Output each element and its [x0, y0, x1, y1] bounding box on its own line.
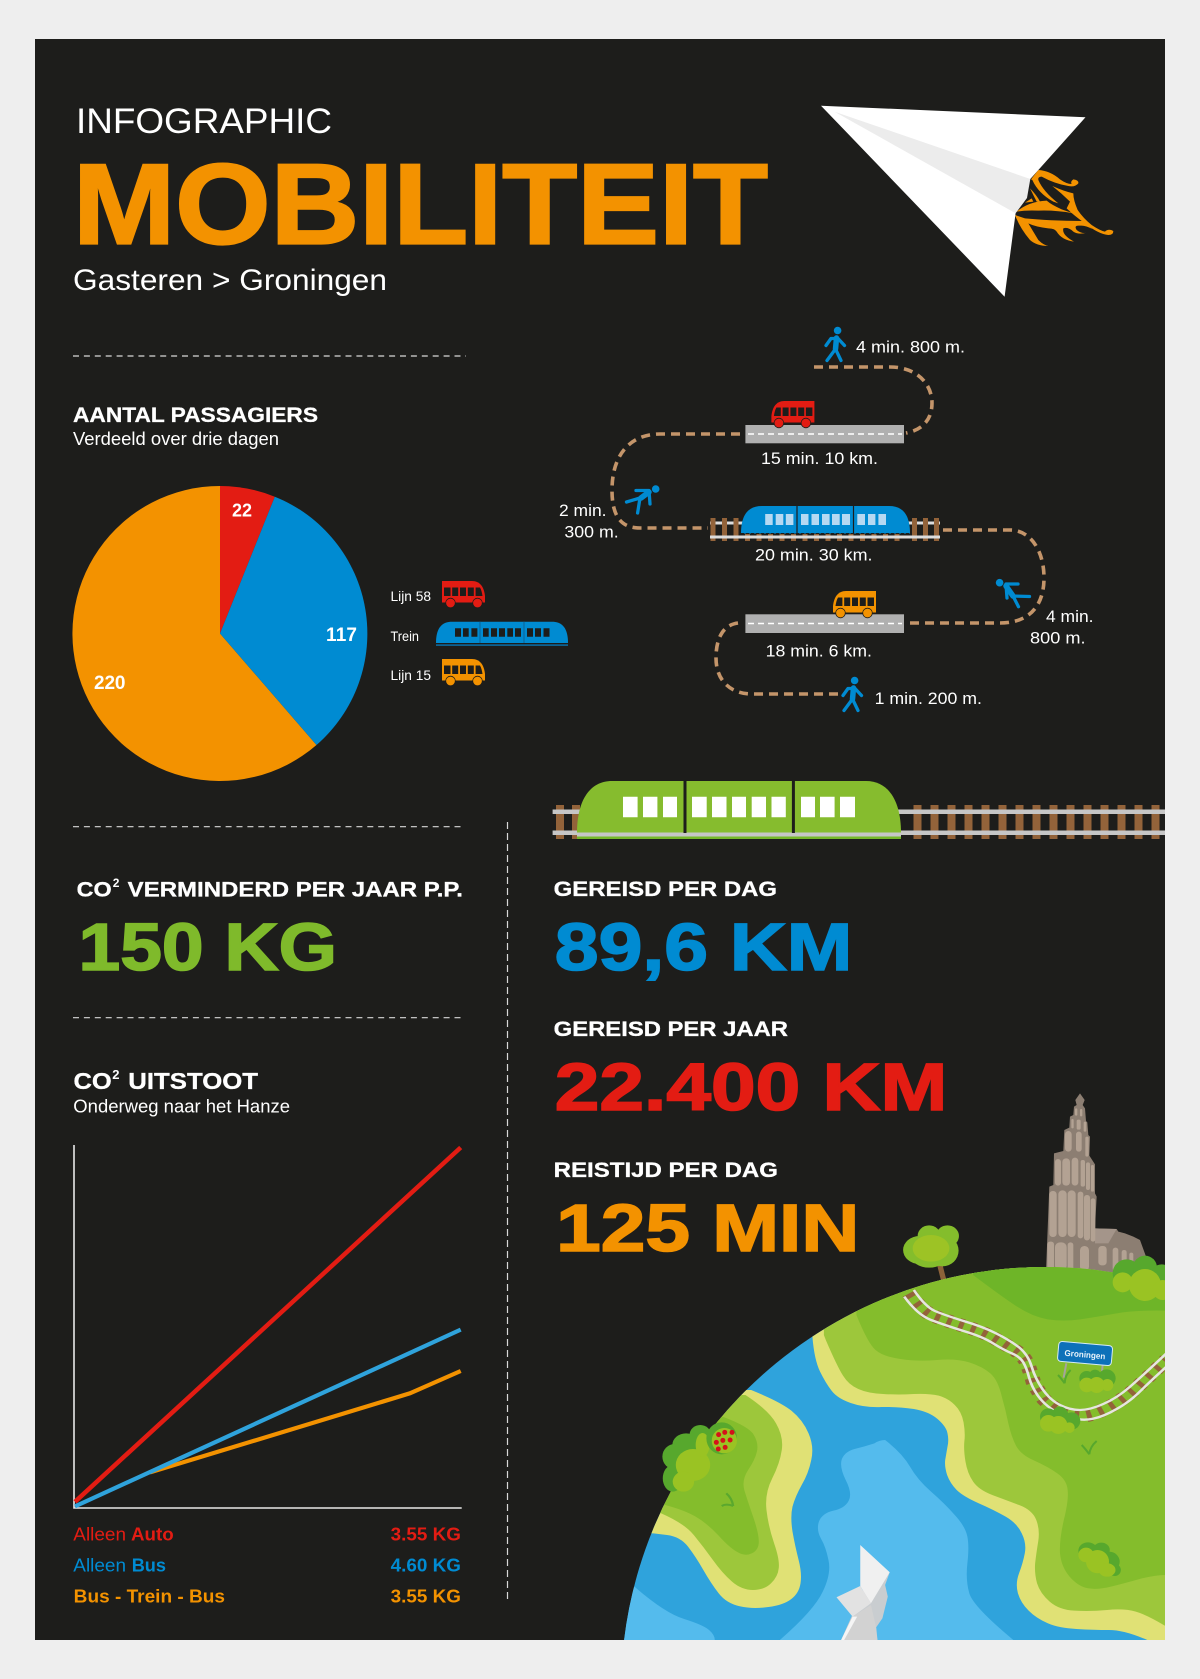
stat: co2 verminderd: 150 KG: [78, 910, 337, 985]
sign: groningen: Groningen: [1064, 1348, 1106, 1361]
train dividers: [685, 781, 793, 833]
icon: walker bottom: [843, 677, 862, 710]
label: 4 min 800 m: 4 min. 800 m.: [856, 338, 965, 357]
legend: alleen auto: [73, 1523, 461, 1544]
chart legend: [73, 1523, 461, 1606]
divider: [73, 826, 465, 828]
label: 18 min 6 km: 18 min. 6 km.: [766, 642, 872, 661]
line: bus: [75, 1330, 461, 1506]
stat: gereisd per dag: [554, 878, 852, 985]
pie chart: 220: [94, 673, 126, 694]
pie chart: [72, 486, 367, 781]
chart axes: [74, 1145, 462, 1508]
pie chart: 22: [232, 501, 252, 521]
icon: runner left: [626, 485, 660, 513]
label: 2 min 300 m: [559, 501, 619, 542]
divider: [73, 1017, 465, 1019]
train body: [577, 781, 901, 833]
bush: lower right: [1078, 1542, 1121, 1577]
stat: gereisd per jaar: [554, 1018, 947, 1125]
bush: island with berries: [662, 1422, 737, 1492]
icon: iceberg: [837, 1545, 890, 1640]
green train on track: [553, 781, 1165, 839]
legend: lijn 58: [390, 581, 485, 608]
icon: blue train on track: [710, 506, 940, 541]
legend: alleen auto: Alleen: [73, 1523, 126, 1544]
title: mobiliteit: MOBILITEIT: [73, 142, 768, 268]
icon: walker top: [826, 327, 844, 360]
train windows: [623, 797, 855, 817]
heading: co2 uitstoot: 2: [112, 1067, 120, 1082]
legend: trein: [390, 622, 568, 646]
heading: infographic: INFOGRAPHIC: [76, 101, 332, 141]
label: 4 min 800 m right: 4 min.: [1046, 607, 1094, 626]
legend: bus trein bus: [74, 1586, 461, 1606]
railway: [904, 1290, 1166, 1420]
icon: tree: [903, 1225, 959, 1282]
legend: alleen bus: 4.60 KG: [391, 1554, 461, 1575]
globe sphere: [624, 1267, 1165, 1640]
route diagram: [559, 327, 1094, 710]
heading: co2 uitstoot: Onderweg naar het Hanze: [73, 1096, 290, 1117]
subtitle: route: Gasteren > Groningen: [73, 264, 387, 297]
legend: lijn 15: [390, 659, 485, 686]
left island: [638, 1390, 812, 1608]
legend: lijn 15: Lijn 15: [390, 667, 431, 683]
bushes and plants near sign: [1040, 1363, 1116, 1454]
legend: bus trein bus: Bus - Trein - Bus: [74, 1586, 225, 1606]
stat: gereisd per jaar: GEREISD PER JAAR: [554, 1018, 788, 1041]
stat: co2 verminderd: VERMINDERD PER JAAR P.P.: [128, 879, 463, 902]
sign: groningen: [1057, 1341, 1113, 1366]
label: 20 min 30 km: 20 min. 30 km.: [755, 546, 872, 565]
line chart: [74, 1145, 462, 1508]
label: 2 min 300 m: 2 min.: [559, 501, 606, 520]
legend: lijn 58: Lijn 58: [390, 588, 431, 604]
heading: co2 uitstoot: UITSTOOT: [128, 1068, 258, 1094]
legend: alleen bus: [73, 1554, 461, 1575]
stat: gereisd per dag: 89,6 KM: [555, 910, 852, 985]
legend: alleen auto: 3.55 KG: [391, 1523, 461, 1544]
heading: co2 uitstoot: CO: [74, 1068, 112, 1094]
main land: [812, 1233, 1166, 1640]
heading: aantal passagiers: AANTAL PASSAGIERS: [73, 404, 318, 427]
stat: reistijd per dag: 125 MIN: [556, 1191, 859, 1266]
icon: martini church: [1046, 1093, 1150, 1275]
icon: orange bus: [833, 591, 876, 618]
label: 1 min 200 m: 1 min. 200 m.: [875, 689, 982, 708]
legend: alleen bus: Bus: [132, 1554, 166, 1575]
stat: reistijd per dag: [554, 1159, 859, 1266]
route: dashed paths: [612, 367, 1044, 694]
road: line 15: [745, 614, 904, 633]
vertical divider: [506, 822, 508, 1602]
stat: reistijd per dag: REISTIJD PER DAG: [554, 1159, 778, 1182]
plane fold: [835, 112, 1030, 213]
pie chart: 117: [326, 625, 357, 646]
pie legend: [390, 581, 568, 686]
icon: red bus: [771, 401, 814, 428]
globe illustration: [624, 1094, 1165, 1640]
line: auto: [75, 1148, 461, 1502]
legend: alleen auto: Auto: [131, 1523, 174, 1544]
icon: runner right: [996, 579, 1030, 607]
stat: co2 verminderd: [77, 876, 463, 985]
heading: aantal passagiers: Verdeeld over drie dagen: [73, 428, 279, 449]
shallow water: [615, 1440, 1013, 1640]
bush: top right: [1112, 1256, 1165, 1301]
label: 15 min 10 km: 15 min. 10 km.: [761, 449, 878, 468]
legend: bus trein bus: 3.55 KG: [391, 1586, 461, 1606]
stat: co2 verminderd: CO: [77, 879, 112, 902]
icon: paper plane with flames: [821, 106, 1113, 297]
label: 4 min 800 m right: [1030, 607, 1094, 648]
stat: gereisd per jaar: 22.400 KM: [555, 1050, 947, 1125]
stat: co2 verminderd: 2: [113, 876, 120, 890]
line: bus trein bus: [150, 1371, 461, 1472]
plane body: [821, 106, 1086, 297]
heading: co2 uitstoot: [73, 1067, 290, 1117]
divider: [73, 355, 466, 357]
track: [553, 805, 1165, 839]
road: line 58: [745, 425, 904, 443]
small plant on island: [722, 1493, 733, 1506]
title block: [73, 101, 768, 297]
legend: trein: Trein: [390, 628, 419, 644]
heading: aantal passagiers: [73, 404, 318, 449]
legend: alleen bus: Alleen: [73, 1554, 126, 1575]
label: 4 min 800 m right: 800 m.: [1030, 629, 1086, 648]
label: 2 min 300 m: 300 m.: [564, 523, 619, 542]
flames: [1015, 170, 1113, 246]
stat: gereisd per dag: GEREISD PER DAG: [554, 878, 777, 901]
